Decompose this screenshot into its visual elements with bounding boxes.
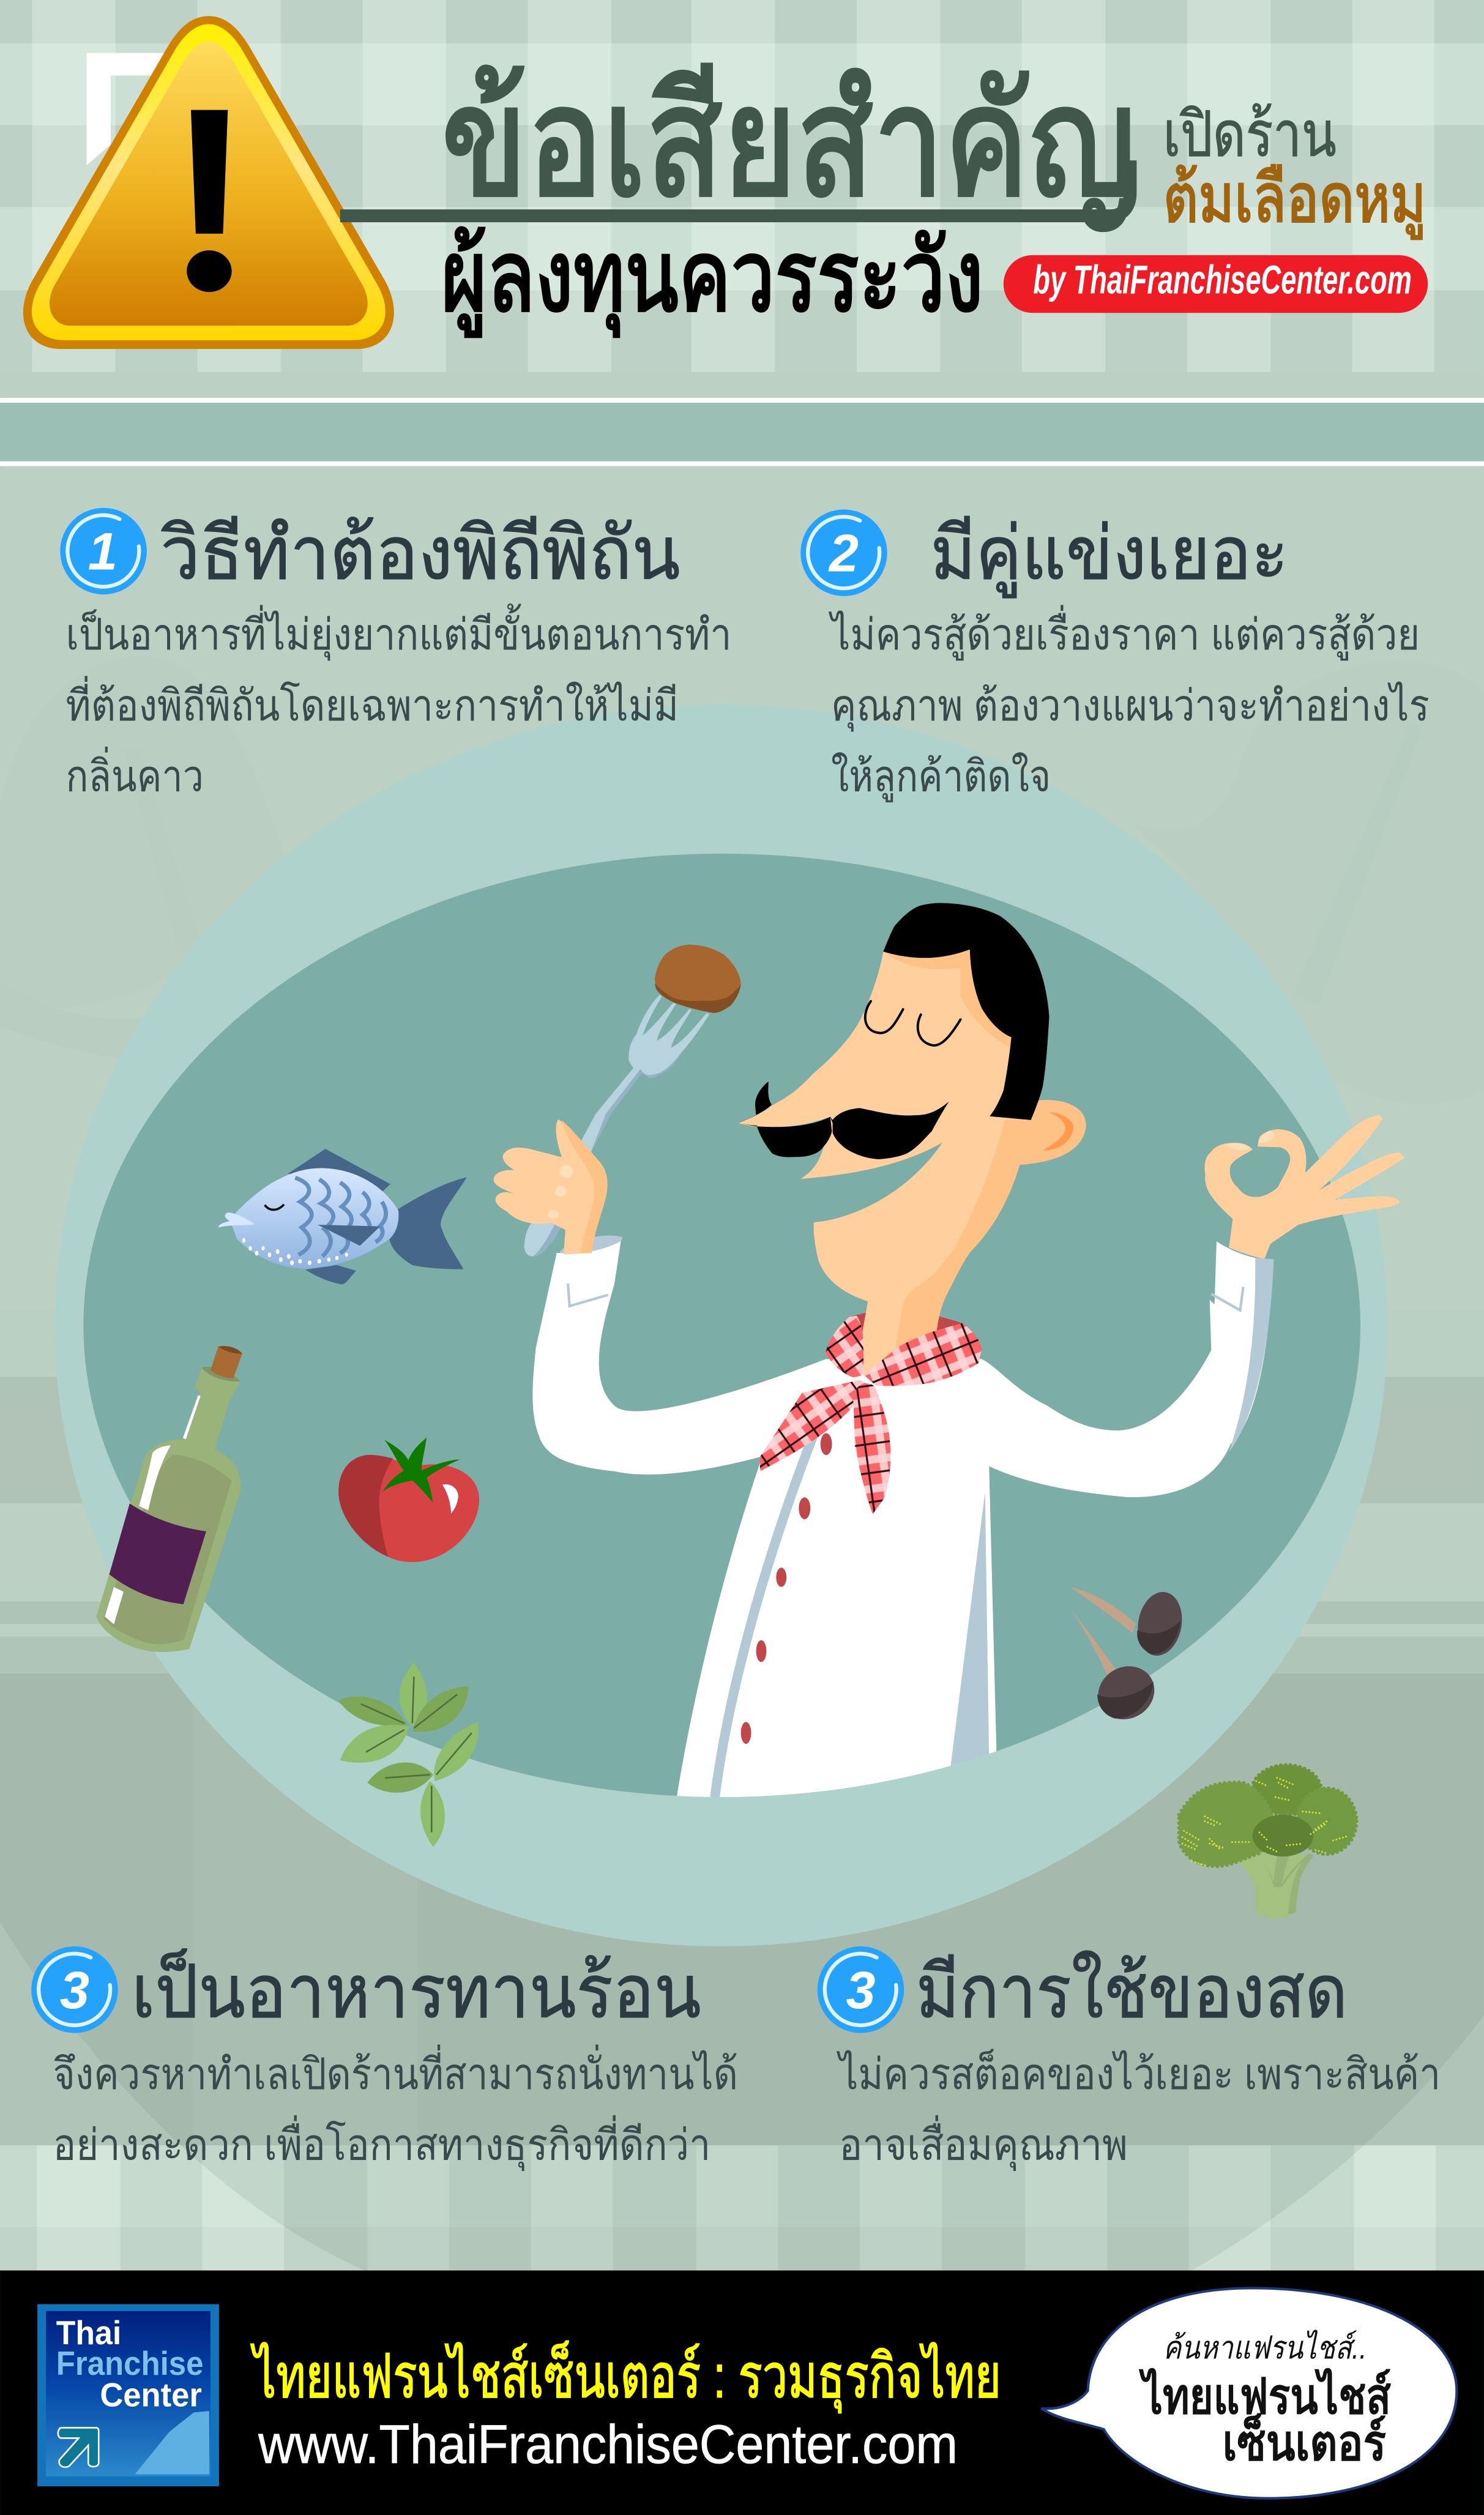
chef: head and neck — [738, 949, 1030, 1375]
icon: number 3 badge — [31, 1946, 118, 2033]
icon: number 2 badge — [800, 509, 887, 596]
heading 3: เป็นอาหารทานร้อน — [132, 1948, 701, 2033]
title underline — [340, 160, 1130, 216]
text block 3: จึงควรหาทำเลเปิดร้านที่สามารถนั่งทานได้ — [53, 2044, 738, 2098]
divider band — [0, 398, 1484, 466]
text block 2: ไม่ควรสู้ด้วยเรื่องราคา แต่ควรสู้ด้วย — [829, 605, 1420, 661]
chef: torso — [676, 1359, 998, 1805]
text block 1: กลิ่นคาว — [66, 746, 204, 800]
text block 2: ให้ลูกค้าติดใจ — [831, 752, 1051, 802]
footer: yellow slogan: ไทยแฟรนไชส์เซ็นเตอร์ : รวมธุรกิจไทย — [250, 2340, 1001, 2413]
section 1 — [60, 508, 731, 800]
footer — [0, 2270, 1484, 2515]
chef: right hand — [1205, 1115, 1405, 1259]
chef: coat buttons — [741, 1433, 832, 1744]
background: faint kitchen utensils — [0, 657, 1484, 1104]
chef: right arm sleeve — [947, 1241, 1274, 1497]
footer: speech bubble — [1041, 2288, 1456, 2498]
title: second line: ผู้ลงทุนควรระวัง — [441, 222, 983, 337]
footer: logo: Thai — [56, 2314, 121, 2352]
chef: eyes — [865, 1001, 961, 1045]
icon: number 3 badge: 3 — [60, 1961, 89, 2020]
title: dish name: ต้มเลือดหมู — [1163, 161, 1426, 239]
heading 2: มีคู่แข่งเยอะ — [931, 512, 1288, 598]
footer: speech bubble: ไทยแฟรนไชส์ — [1138, 2367, 1391, 2424]
section 4 — [818, 1946, 1441, 2172]
text block 1: ที่ต้องพิถีพิถันโดยเฉพาะการทำให้ไม่มี — [66, 676, 679, 730]
illustration: broccoli — [1179, 1765, 1357, 1919]
footer: speech bubble: ค้นหาแฟรนไชส์.. — [1163, 2330, 1367, 2366]
chef: left cuff inner — [560, 1236, 622, 1254]
illustration: herb leaves — [338, 1662, 479, 1847]
footer: logo: Center — [100, 2376, 202, 2414]
icon: second number 3 badge: 3 — [846, 1961, 876, 2020]
icon: second number 3 badge — [818, 1946, 904, 2033]
footer: speech bubble: เซ็นเตอร์ — [1223, 2412, 1386, 2471]
warning sign backing square — [87, 53, 168, 165]
text block 4: อาจเสื่อมคุณภาพ — [839, 2115, 1128, 2172]
text block 4 — [837, 2049, 1441, 2172]
icon: number 1 badge — [60, 508, 147, 594]
big pale circle — [54, 704, 1388, 1946]
illustration: wine bottle — [96, 1346, 242, 1652]
heading 1: วิธีทำต้องพิถีพิถัน — [160, 512, 680, 594]
inner teal oval — [83, 854, 1360, 1797]
title: open shop: เปิดร้าน — [1163, 99, 1337, 169]
chef: scarf — [760, 1316, 982, 1514]
text block 3 — [53, 2044, 738, 2172]
text block 1: เป็นอาหารที่ไม่ยุ่งยากแต่มีขั้นตอนการทำ — [66, 604, 731, 661]
illustration: tomato — [338, 1438, 479, 1562]
section 3 — [31, 1946, 738, 2172]
title: main heading: ข้อเสียสำคัญ — [441, 56, 1136, 230]
text block 1 — [66, 604, 731, 800]
chef: ear — [1019, 1100, 1086, 1165]
footer: logo: Franchise — [56, 2344, 203, 2382]
footer: logo — [37, 2304, 219, 2486]
section 2 — [800, 509, 1430, 802]
title — [340, 56, 1136, 230]
illustration: chef — [494, 903, 1405, 1805]
chef: forehead shadow — [883, 949, 1012, 1047]
background: header check pattern — [0, 0, 1484, 372]
icon: number 2 badge: 2 — [828, 524, 859, 583]
chef: left hand — [494, 1119, 608, 1255]
icon: warning triangle — [23, 16, 394, 349]
chef: hair — [883, 903, 1050, 1120]
text block 3: อย่างสะดวก เพื่อโอกาสทางธุรกิจที่ดีกว่า — [53, 2115, 710, 2172]
chef: left arm sleeve — [532, 1241, 860, 1474]
heading 4: มีการใช้ของสด — [916, 1950, 1348, 2033]
illustration: fork — [524, 995, 709, 1257]
chef: nose edge over moustache — [738, 1074, 830, 1126]
illustration: olives — [1070, 1587, 1187, 1730]
icon: number 1 badge: 1 — [88, 523, 117, 581]
chef: moustache — [738, 1082, 949, 1159]
footer: website: www.ThaiFranchiseCenter.com — [258, 2413, 958, 2475]
chef: neck shadow — [893, 1119, 1030, 1367]
background: lower bands — [0, 1309, 1484, 2270]
illustration: fish — [218, 1149, 467, 1285]
illustration: meat — [655, 944, 741, 1013]
chef: back of scarf — [849, 1312, 963, 1364]
red badge — [1004, 255, 1428, 313]
text block 2 — [829, 605, 1430, 802]
